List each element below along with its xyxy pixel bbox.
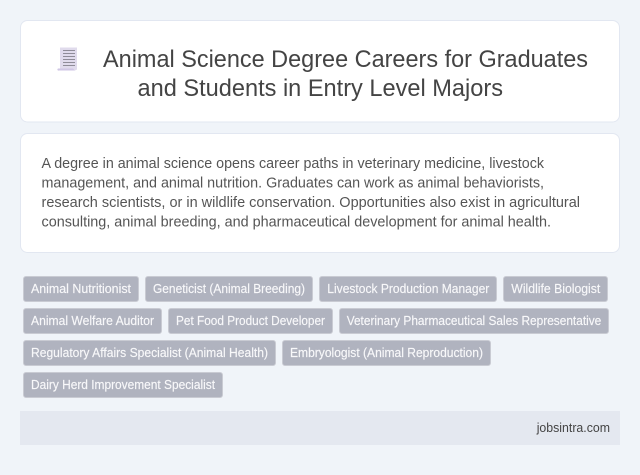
- tag: Livestock Production Manager: [320, 276, 496, 302]
- description text: A degree in animal science opens career paths in veterinary medicine, livestock: [42, 156, 545, 172]
- tag: Regulatory Affairs Specialist: Regulatory Affairs Specialist (Animal Health): [31, 346, 268, 360]
- description text: [42, 156, 580, 230]
- footer bar: [20, 411, 620, 445]
- panel: description card: [20, 134, 620, 252]
- tag: Pet Food Product Developer: Pet Food Product Developer: [176, 314, 325, 328]
- description text: management, and animal nutrition. Graduates can work as animal behaviorists,: [42, 176, 544, 192]
- tag: Pet Food Product Developer: [168, 308, 332, 334]
- tag: Animal Nutritionist: [24, 276, 138, 302]
- tag: Dairy Herd Improvement Specialist: [24, 372, 222, 398]
- tag: Animal Welfare Auditor: [24, 308, 162, 334]
- title: [103, 46, 588, 102]
- description text: consulting, animal breeding, and pharmaceutical development for animal health.: [42, 214, 551, 230]
- tag: Embryologist: [282, 340, 490, 366]
- title: and Students in Entry Level Majors: [138, 75, 503, 102]
- tag: Veterinary Pharmaceutical Sales Representative: Veterinary Pharmaceutical Sales Representative: [347, 314, 601, 328]
- tag: Dairy Herd Improvement Specialist: Dairy Herd Improvement Specialist: [31, 378, 215, 392]
- tag: Geneticist: Geneticist (Animal Breeding): [153, 282, 305, 296]
- tag: Livestock Production Manager: Livestock Production Manager: [327, 282, 489, 296]
- tag: Animal Nutritionist: Animal Nutritionist: [31, 282, 132, 296]
- footer source text: jobsintra.com: [536, 421, 610, 435]
- description text: research scientists, or in wildlife conservation. Opportunities also exist in agricultural: [42, 195, 580, 211]
- tag: Embryologist: Embryologist (Animal Reproduction): [290, 346, 483, 360]
- title: Animal Science Degree Careers for Graduates: [103, 46, 588, 73]
- tag: Geneticist: [146, 276, 312, 302]
- icon: document scroll: [57, 48, 77, 71]
- panel: header card: [20, 20, 620, 122]
- tag: Animal Welfare Auditor: Animal Welfare Auditor: [31, 314, 154, 328]
- tag: Veterinary Pharmaceutical Sales Representative: [340, 308, 608, 334]
- tag: Wildlife Biologist: [504, 276, 608, 302]
- panel: career tags: [24, 276, 608, 398]
- tag: Regulatory Affairs Specialist: [24, 340, 276, 366]
- tag: Wildlife Biologist: Wildlife Biologist: [511, 282, 601, 296]
